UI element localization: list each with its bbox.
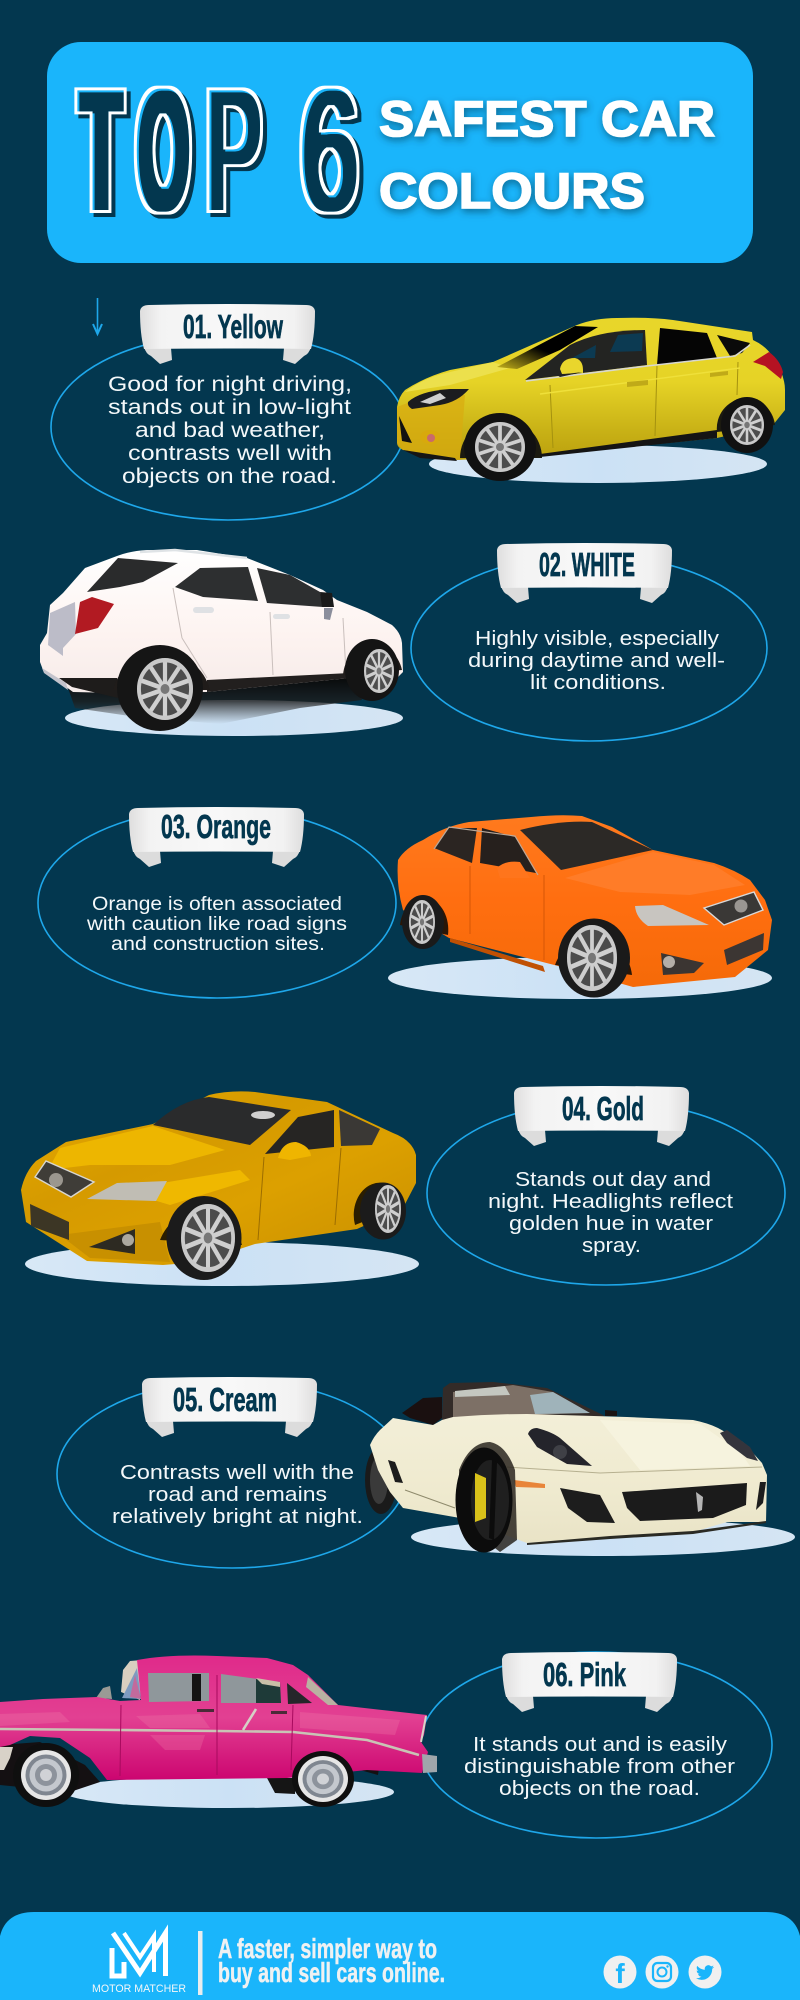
- text: gold description: [488, 1168, 733, 1257]
- sill: [540, 430, 717, 457]
- banner: 02 WHITE: 02. WHITE: [539, 546, 635, 583]
- text: gold description: spray.: [582, 1234, 641, 1257]
- podium: [25, 1242, 419, 1286]
- text: pink description: [464, 1733, 735, 1800]
- text: pink description: It stands out and is easily: [473, 1733, 728, 1756]
- podium: [388, 957, 772, 999]
- car: pink classic sedan: [0, 1656, 437, 1808]
- bumper: [422, 1754, 437, 1773]
- wheels: [464, 397, 773, 481]
- text: pink description: objects on the road.: [499, 1777, 700, 1800]
- divider: [198, 1931, 202, 1995]
- footer band: [0, 1912, 800, 2000]
- panel: 01 yellow description: [51, 304, 405, 520]
- text: yellow description: [108, 372, 352, 488]
- door lines: [120, 1675, 293, 1776]
- title: TOP 6: 6: [300, 56, 358, 246]
- text: yellow description: contrasts well with: [128, 441, 332, 465]
- chrome sash: [243, 1709, 256, 1730]
- banner: 06 Pink: [502, 1652, 677, 1712]
- icon: twitter: [688, 1956, 722, 1988]
- side vent front: [560, 1488, 615, 1523]
- paint reflections: [0, 1712, 400, 1750]
- tagline: [218, 1933, 445, 1988]
- title: TOP 6: O: [137, 55, 189, 246]
- headlight: [87, 1181, 167, 1201]
- details: [258, 1148, 341, 1240]
- banner: 02 WHITE: [497, 543, 672, 603]
- panel: 02 white description: [411, 543, 767, 741]
- podium: [64, 1776, 394, 1808]
- car body: [398, 815, 772, 987]
- podium: [65, 700, 403, 736]
- headlights: [528, 1428, 592, 1466]
- text: yellow description: and bad weather,: [135, 418, 325, 442]
- title: TOP 6: [80, 54, 358, 246]
- seat and roll bar: [402, 1397, 442, 1425]
- panel: 04 gold description: [427, 1086, 785, 1285]
- hood crease: [507, 1467, 762, 1473]
- car: gold sedan: [21, 1091, 419, 1286]
- door seam: [405, 1490, 455, 1508]
- chrome stripe: [0, 1729, 419, 1755]
- mirror: [560, 358, 583, 374]
- ground shadow: [68, 674, 362, 724]
- text: yellow description: Good for night driving,: [108, 372, 352, 396]
- banner: 03 Orange: 03. Orange: [161, 808, 271, 845]
- podium: [429, 445, 767, 483]
- text: white description: Highly visible, especially: [475, 627, 720, 650]
- wheels: [13, 1743, 354, 1807]
- title: TOP 6: T: [80, 54, 121, 246]
- car body: [370, 1414, 767, 1543]
- details: [470, 866, 544, 960]
- text: white description: lit conditions.: [530, 671, 666, 694]
- front bumper shadow: [527, 1521, 766, 1545]
- podium: [411, 1518, 795, 1556]
- car body: [397, 318, 785, 460]
- roof rail: [140, 550, 247, 558]
- text: white description: [468, 627, 725, 694]
- grille: [622, 1483, 747, 1521]
- wheel arches: [160, 1210, 242, 1245]
- banner: 06 Pink: 06. Pink: [543, 1656, 626, 1693]
- mirror: [497, 862, 530, 878]
- wheel arches: [113, 652, 210, 690]
- logo: Motor Matcher: [92, 1933, 186, 1995]
- indicator: [514, 1480, 545, 1488]
- mirror: [320, 592, 334, 607]
- text: orange description: and construction sites.: [111, 934, 325, 955]
- details: [173, 588, 346, 678]
- car: yellow hatchback: [397, 318, 785, 483]
- text: cream description: [112, 1461, 363, 1528]
- banner: 03 Orange: [129, 807, 304, 867]
- title: safest car colours: SAFEST CAR: [379, 91, 715, 147]
- panel: 06 pink description: [420, 1652, 772, 1838]
- side vent: [388, 1460, 403, 1483]
- car body: [40, 550, 403, 693]
- wheel arches: [400, 898, 448, 935]
- banner: 01 Yellow: [140, 304, 315, 364]
- text: cream description: Contrasts well with the: [120, 1461, 354, 1484]
- grille: [704, 892, 763, 925]
- front wheel: [456, 1442, 517, 1552]
- banner: 01 Yellow: 01. Yellow: [183, 308, 283, 345]
- banner: 05 Cream: 05. Cream: [173, 1381, 277, 1418]
- underbody: [267, 1778, 295, 1794]
- text: pink description: distinguishable from other: [464, 1755, 735, 1778]
- text: orange description: [86, 894, 347, 955]
- fog light: [661, 953, 704, 975]
- text: orange description: with caution like road signs: [86, 914, 347, 935]
- windshield: [122, 1668, 141, 1699]
- door handles: [197, 1709, 214, 1712]
- windows: [148, 1673, 209, 1702]
- wheels: [117, 639, 399, 731]
- header panel: [47, 42, 753, 263]
- taillight: [753, 352, 783, 379]
- car: white SUV: [40, 550, 403, 736]
- text: gold description: Stands out day and: [515, 1168, 711, 1191]
- tagline: buy and sell cars online.: [218, 1957, 445, 1988]
- taillight: [75, 597, 114, 634]
- icon: facebook: f: [615, 1958, 625, 1989]
- title: TOP 6: P: [206, 54, 261, 246]
- logo: Motor Matcher: MOTOR MATCHER: [92, 1983, 186, 1995]
- text: white description: during daytime and well-: [468, 649, 725, 672]
- roof trim: [121, 1660, 142, 1700]
- text: cream description: road and remains: [148, 1483, 327, 1506]
- details: [550, 362, 738, 448]
- title: safest car colours: COLOURS: [379, 163, 645, 219]
- text: yellow description: stands out in low-light: [108, 395, 351, 419]
- wheels: [402, 895, 630, 998]
- arrow: down: [93, 298, 102, 334]
- banner: 04 Gold: [514, 1086, 689, 1146]
- text: cream description: relatively bright at night.: [112, 1505, 363, 1528]
- text: gold description: night. Headlights reflect: [488, 1190, 733, 1213]
- text: gold description: golden hue in water: [509, 1212, 713, 1235]
- car body: [0, 1656, 428, 1780]
- sill: [207, 673, 350, 692]
- panel: 03 orange description: [38, 807, 396, 998]
- fog light and intake: [399, 416, 412, 443]
- mirror ornaments: [96, 1686, 112, 1699]
- tagline: A faster, simpler way to: [218, 1933, 437, 1964]
- banner: 04 Gold: 04. Gold: [562, 1090, 644, 1127]
- banner: 05 Cream: [142, 1377, 317, 1437]
- windscreen: [442, 1382, 607, 1420]
- icon: facebook: [604, 1956, 636, 1989]
- headlight: [635, 905, 709, 926]
- wheels: [166, 1182, 406, 1280]
- text: yellow description: objects on the road.: [122, 464, 337, 488]
- rear wheel: [365, 1446, 397, 1514]
- windows: [87, 558, 178, 592]
- title: safest car colours: [379, 91, 715, 219]
- mirror: [278, 1142, 311, 1160]
- wheel arches: [460, 418, 542, 458]
- headlight: [408, 389, 469, 409]
- car: cream convertible: [365, 1382, 795, 1556]
- grille: [35, 1161, 94, 1197]
- rear panel: [48, 602, 76, 656]
- fin tip: [421, 1716, 426, 1742]
- windows: [497, 326, 598, 369]
- text: orange description: Orange is often associated: [92, 894, 342, 915]
- windows: [520, 822, 653, 870]
- car: orange sedan: [388, 815, 772, 999]
- panel: 05 cream description: [57, 1377, 407, 1568]
- icon: instagram: [646, 1956, 678, 1988]
- windows: [153, 1097, 291, 1145]
- fog light: [89, 1229, 135, 1254]
- car body: [21, 1091, 416, 1265]
